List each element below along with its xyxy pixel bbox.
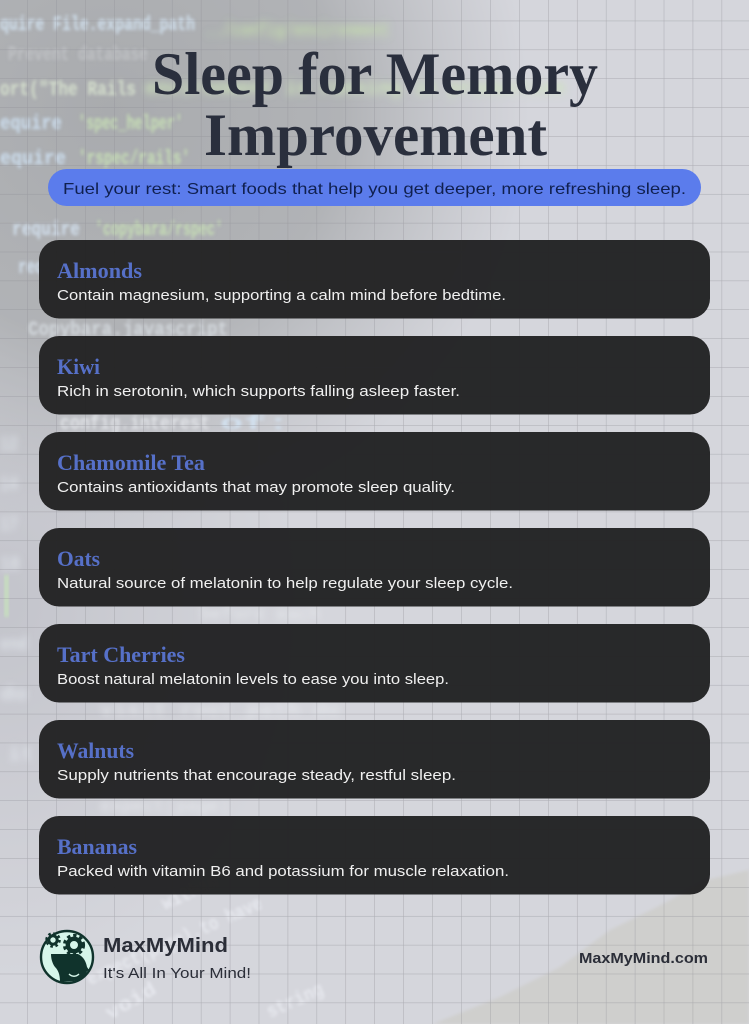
background: blurred code screenshot: do — [0, 684, 28, 707]
icon: MaxMyMind logo — [41, 931, 93, 983]
background: blurred code screenshot: within — [158, 871, 223, 916]
background: blurred code screenshot: of: — [220, 413, 290, 436]
panel: Chamomile Tea — [39, 432, 710, 510]
subtitle pill — [48, 169, 701, 206]
panel: Kiwi: Rich in serotonin, which supports falling asleep faster. — [57, 384, 460, 400]
website url: MaxMyMind.com — [579, 950, 708, 967]
background: blurred code screenshot: it — [8, 744, 34, 767]
panel: Walnuts: Supply nutrients that encourage steady, restful sleep. — [57, 768, 456, 784]
background: blurred code screenshot: Prevent database — [8, 44, 148, 67]
background: blurred code screenshot: environment is running in production — [145, 78, 565, 101]
panel: Oats: Natural source of melatonin to help regulate your sleep cycle. — [57, 576, 513, 592]
background: blurred code screenshot: expect(page) — [100, 796, 230, 819]
panel: Almonds: Almonds — [57, 258, 142, 283]
panel: Kiwi — [39, 336, 710, 414]
background: blurred code screenshot: require — [18, 257, 78, 280]
background: blurred code screenshot: 14 — [0, 474, 18, 497]
panel: Bananas: Packed with vitamin B6 and potassium for muscle relaxation. — [57, 864, 509, 880]
panel: Chamomile Tea: Chamomile Tea — [57, 450, 205, 475]
panel: Almonds: Contain magnesium, supporting a calm mind before bedtime. — [57, 288, 506, 304]
panel: Chamomile Tea: Contains antioxidants that may promote sleep quality. — [57, 480, 455, 496]
background: blurred code screenshot: equire — [0, 148, 66, 171]
panel: Oats: Oats — [57, 546, 100, 571]
brand name and tagline: MaxMyMind — [103, 935, 228, 957]
background: blurred code screenshot: 12 — [0, 434, 18, 457]
background: blurred code screenshot: expect(page).to have — [83, 893, 266, 991]
brand name and tagline — [103, 935, 251, 982]
background: blurred code screenshot: 17 — [0, 514, 18, 537]
brand name and tagline: It's All In Your Mind! — [103, 965, 251, 982]
panel: Kiwi: Kiwi — [57, 354, 100, 379]
background: blurred code screenshot: end — [0, 634, 28, 657]
panel: Almonds — [39, 240, 710, 318]
panel: Bananas: Bananas — [57, 834, 137, 859]
panel: Oats — [39, 528, 710, 606]
panel: Tart Cherries — [39, 624, 710, 702]
background: blurred code screenshot: ../config/environment — [205, 20, 390, 43]
panel: Walnuts — [39, 720, 710, 798]
background: blurred code screenshot: equire — [0, 113, 62, 136]
background: blurred code screenshot: require — [12, 219, 80, 242]
subtitle pill: Fuel your rest: Smart foods that help you get deeper, more refreshing sleep. — [63, 181, 686, 198]
background: blurred code screenshot: ort("The Rails — [0, 79, 136, 102]
background: blurred code screenshot: 'rspec/rails' — [78, 148, 190, 171]
background: blurred code screenshot: config.interest — [60, 413, 210, 436]
background: blurred code screenshot: before each — [200, 604, 320, 627]
background: blurred code screenshot: 'spec_helper' — [78, 113, 183, 136]
background: blurred code screenshot: 'copybara/rspec' — [95, 219, 223, 242]
panel: Tart Cherries: Tart Cherries — [57, 642, 185, 667]
background: blurred code screenshot: Copybara.javascript — [28, 319, 228, 342]
title: Sleep for Memory — [152, 41, 598, 107]
background: blurred code screenshot: string — [263, 979, 328, 1024]
title: Improvement — [204, 102, 547, 168]
panel: Walnuts: Walnuts — [57, 738, 134, 763]
background: blurred code screenshot: 18 — [0, 554, 20, 577]
background: blurred code screenshot: visit root_path do — [100, 700, 340, 723]
panel: Bananas — [39, 816, 710, 894]
panel: Tart Cherries: Boost natural melatonin levels to ease you into sleep. — [57, 672, 449, 688]
title — [152, 41, 598, 168]
background: blurred code screenshot: quire File.expand_path — [0, 14, 195, 37]
